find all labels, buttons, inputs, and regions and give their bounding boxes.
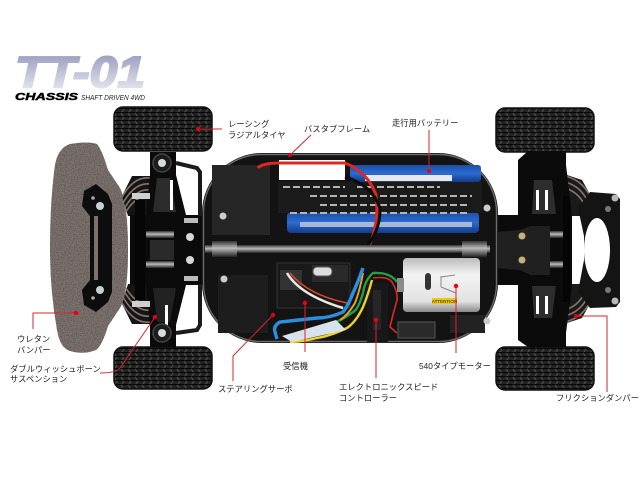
battery pack bbox=[278, 160, 482, 233]
tire: rear top bbox=[496, 108, 594, 152]
label: double wishbone suspension: サスペンション bbox=[10, 374, 67, 384]
label: bathtub frame: バスタブフレーム bbox=[304, 124, 370, 134]
subtitle: CHASSIS: CHASSIS bbox=[15, 91, 78, 103]
drive shaft bbox=[205, 241, 490, 257]
label: motor: 540タイプモーター bbox=[419, 361, 491, 371]
white label bbox=[279, 160, 345, 180]
title: TT-01: TT-01 bbox=[15, 48, 145, 97]
label: battery: 走行用バッテリー bbox=[392, 118, 458, 128]
label: double wishbone suspension: ダブルウィッシュボーン bbox=[10, 364, 101, 374]
leader: battery bbox=[427, 130, 431, 173]
tire: rear bottom bbox=[496, 347, 594, 390]
rear springs bbox=[564, 174, 592, 324]
label: speed controller: コントローラー bbox=[339, 393, 397, 403]
subtitle: shaft driven 4WD: SHAFT DRIVEN 4WD bbox=[81, 95, 145, 102]
logo: TT-01 CHASSIS bbox=[15, 48, 145, 103]
urethane bumper bbox=[50, 142, 128, 353]
receiver bbox=[277, 263, 350, 308]
leader: racing radial tire bbox=[196, 127, 222, 131]
label: racing radial tire: レーシング bbox=[228, 119, 269, 129]
540 motor bbox=[397, 258, 480, 312]
bumper mount bbox=[82, 184, 112, 312]
rear wing mount bbox=[578, 192, 620, 308]
label: urethane bumper: バンパー bbox=[17, 345, 51, 355]
tire: front bottom bbox=[114, 347, 212, 389]
leader: receiver bbox=[303, 301, 307, 352]
leader: speed controller bbox=[374, 318, 378, 378]
540 motor: ATTENTION bbox=[432, 299, 457, 304]
tire: front top bbox=[114, 107, 212, 151]
label: speed controller: エレクトロニックスピード bbox=[339, 382, 438, 392]
leader: urethane bumper bbox=[33, 311, 78, 329]
leader: bathtub frame bbox=[288, 135, 311, 157]
wiring harness bbox=[275, 268, 397, 342]
bathtub frame bbox=[202, 153, 498, 343]
label: receiver: 受信機 bbox=[283, 361, 309, 371]
battery wires bbox=[258, 163, 380, 252]
label: steering servo: ステアリングサーボ bbox=[218, 384, 293, 394]
leader: motor bbox=[454, 284, 458, 353]
leader: friction damper bbox=[574, 314, 607, 392]
front suspension bbox=[122, 152, 205, 347]
leader: steering servo bbox=[233, 313, 275, 381]
label: urethane bumper: ウレタン bbox=[17, 334, 50, 344]
front springs bbox=[122, 176, 150, 324]
label: friction damper: フリクションダンパー bbox=[556, 393, 639, 403]
leader: double wishbone suspension bbox=[100, 315, 157, 373]
label: racing radial tire: ラジアルタイヤ bbox=[228, 130, 286, 140]
rear suspension bbox=[490, 151, 592, 347]
electronic speed controller bbox=[367, 283, 435, 342]
